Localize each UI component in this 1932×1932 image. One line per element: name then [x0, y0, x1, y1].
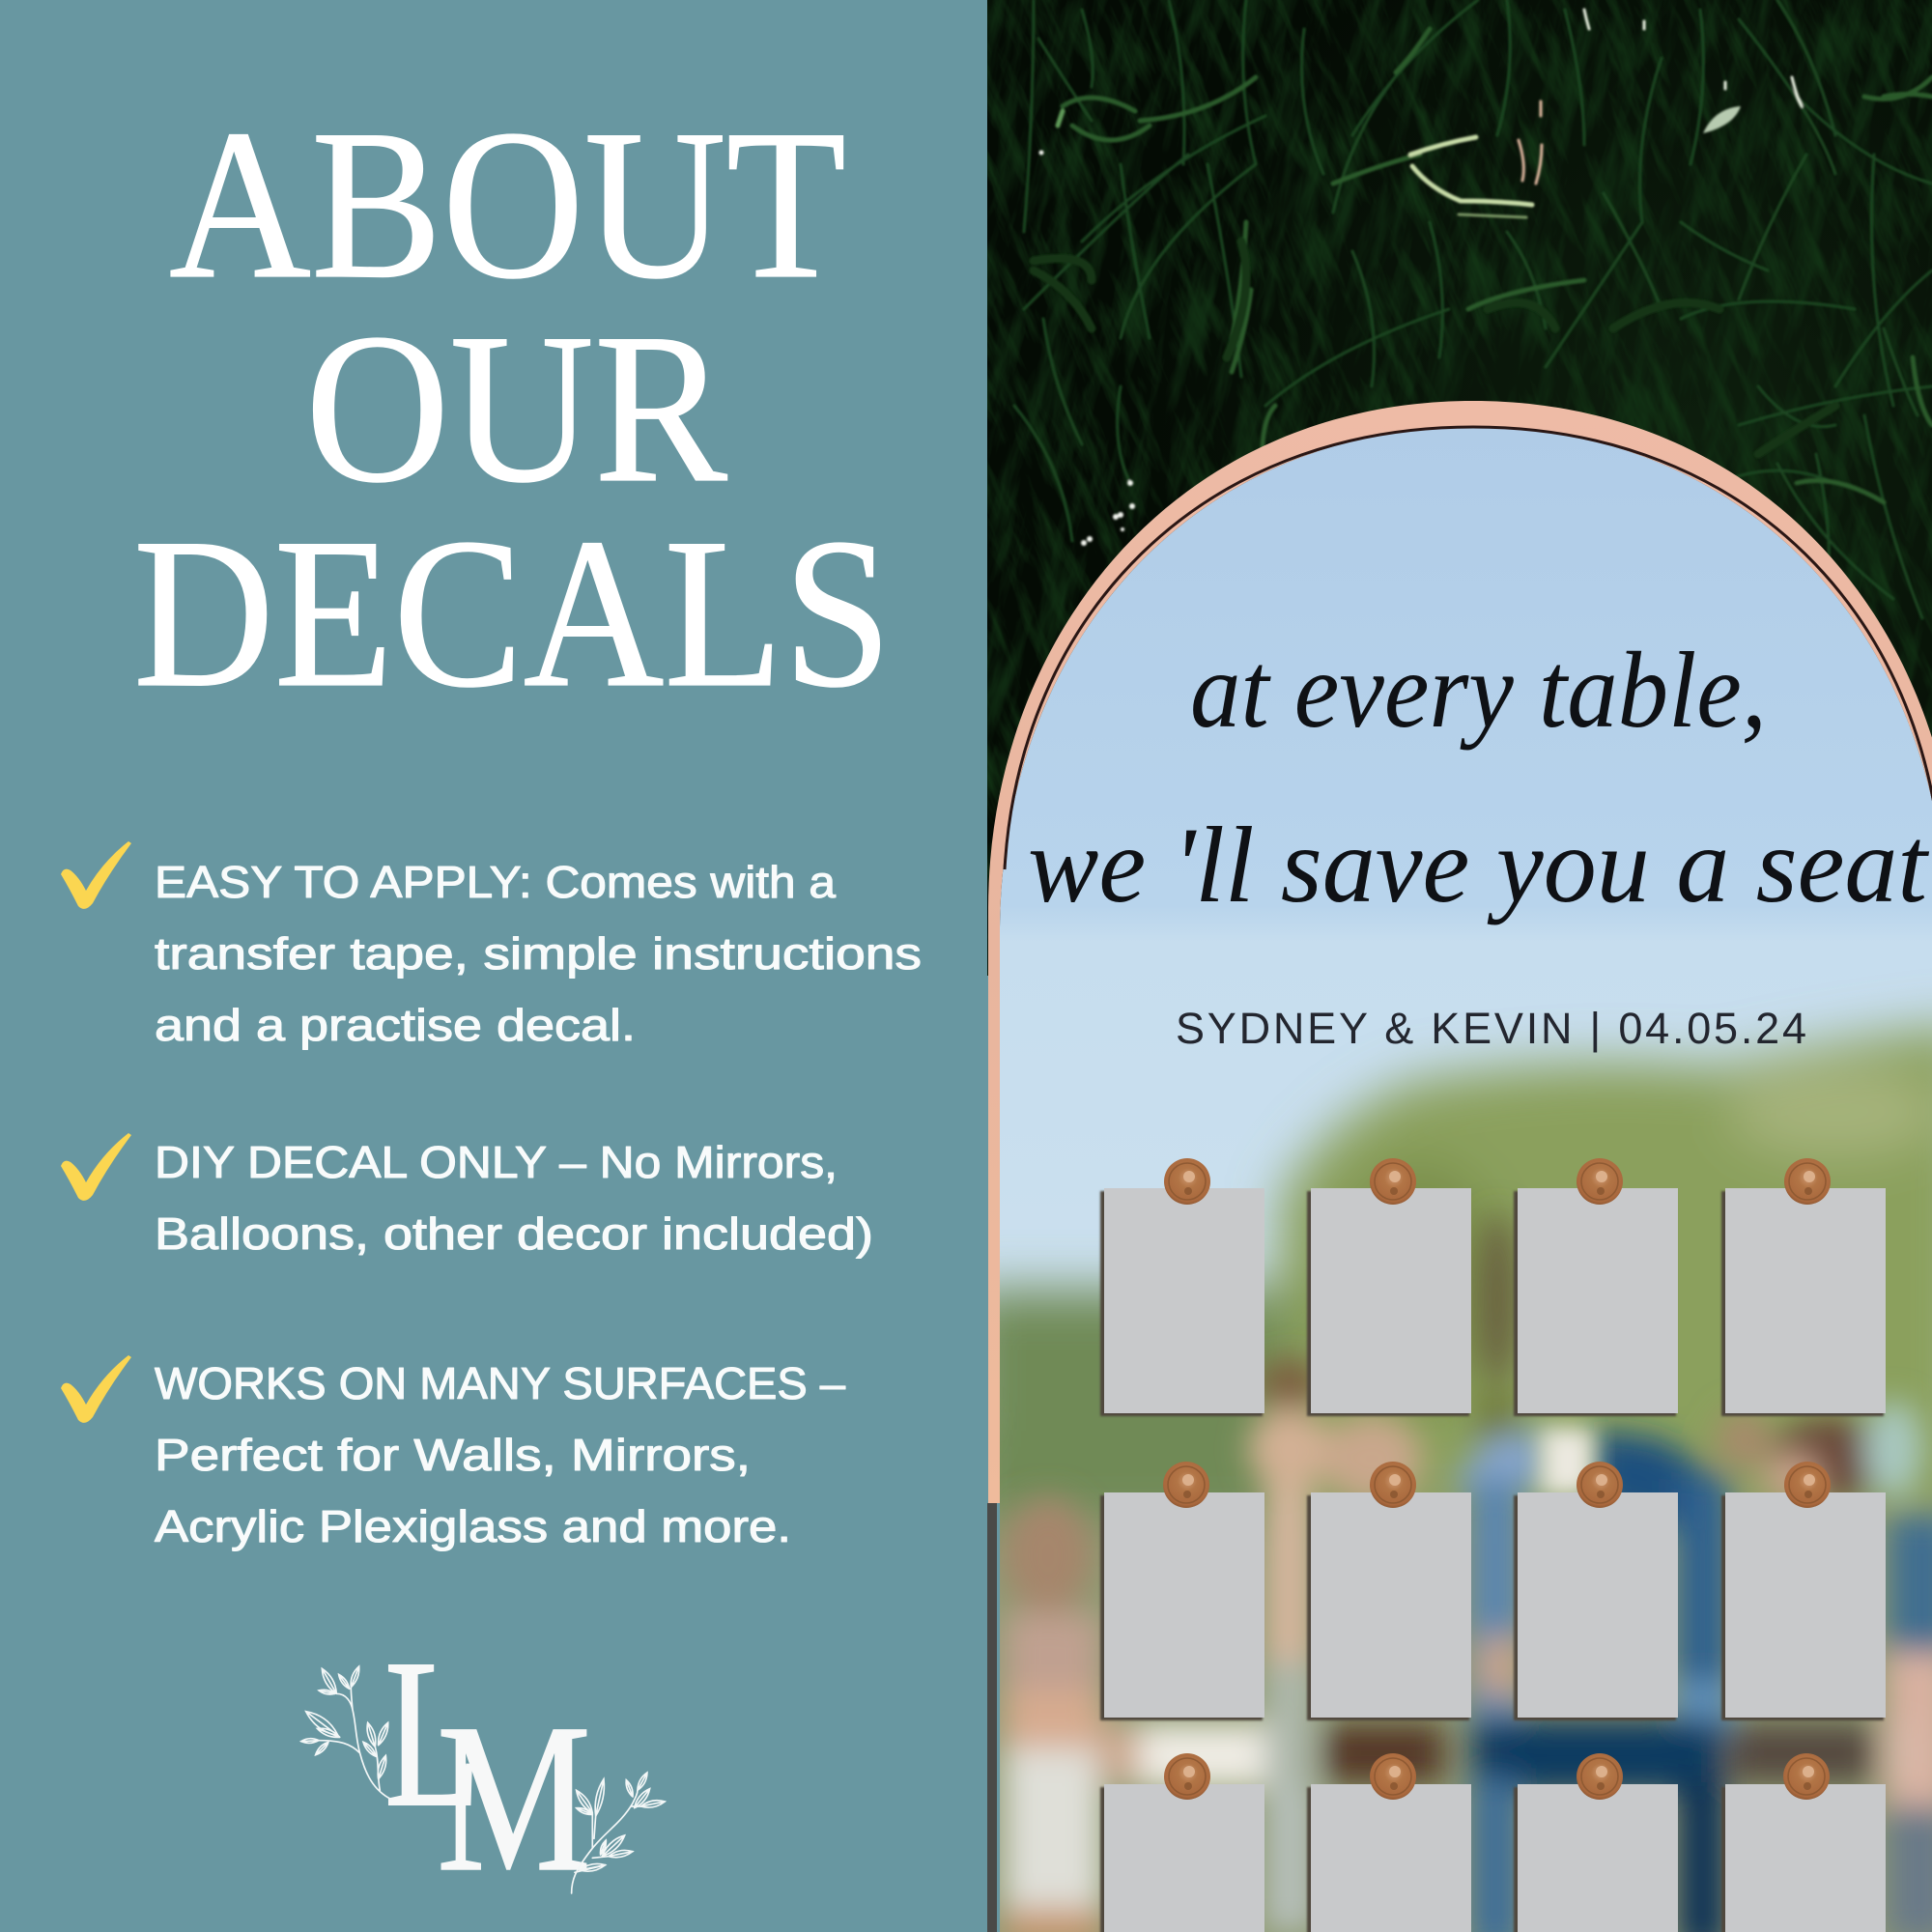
- text block: DIY decal only: DIY DECAL ONLY – No Mirrors,: [155, 1137, 838, 1187]
- text block: DIY decal only: Balloons, other decor included): [155, 1208, 873, 1259]
- place cards: row 1: [1100, 1158, 1886, 1416]
- icon: yellow check mark: [61, 841, 131, 909]
- text block: works on many surfaces: Acrylic Plexiglass and more.: [155, 1501, 791, 1551]
- mirror frame: rose gold arch: [987, 401, 1932, 1932]
- title: About Our Decals: ABOUT: [169, 86, 846, 324]
- text block: easy to apply: transfer tape, simple instructions: [155, 928, 922, 979]
- feature item: works on many surfaces: [61, 1355, 845, 1551]
- photo reflection: blurred trees and wedding party: [947, 1024, 1932, 1932]
- monogram letter L: L: [384, 1615, 481, 1851]
- monogram letter M: M: [437, 1680, 591, 1916]
- trees: [947, 1024, 1932, 1932]
- sprigs: hand-drawn leaves: [301, 1666, 665, 1893]
- blue suit: [1449, 1430, 1546, 1488]
- text block: works on many surfaces: WORKS ON MANY SURFACES –: [155, 1358, 845, 1408]
- upper figures and faces: [1257, 1358, 1322, 1408]
- script heading: at every table, we'll save you a seat: at every table,: [1190, 631, 1767, 751]
- photo: dark foliage background: [987, 0, 1932, 976]
- foliage blades: [1014, 0, 1932, 618]
- script heading: at every table, we'll save you a seat: [1028, 631, 1930, 925]
- title: About Our Decals: [133, 86, 892, 732]
- text block: DIY decal only: [155, 1137, 873, 1259]
- text block: easy to apply: EASY TO APPLY: Comes with a: [155, 857, 836, 907]
- feature item: easy to apply: [61, 841, 922, 1050]
- text block: works on many surfaces: [155, 1358, 845, 1551]
- place cards: row 3: [1100, 1753, 1886, 1932]
- script heading: at every table, we'll save you a seat: we 'll save you a seat: [1028, 806, 1930, 925]
- panel: left teal background: [0, 0, 987, 1932]
- mirror: arch sign surface: [947, 415, 1932, 1932]
- names and date line: SYDNEY & KEVIN | 04.05.24: [1176, 1004, 1806, 1053]
- place cards: row 2: [1100, 1462, 1886, 1720]
- text block: easy to apply: [155, 857, 922, 1050]
- lower figures: [1889, 1517, 1932, 1662]
- logo: LM monogram with leaves: [301, 1615, 665, 1916]
- icon: yellow check mark: [61, 1133, 131, 1201]
- icon: yellow check mark: [61, 1355, 131, 1423]
- title: About Our Decals: OUR: [305, 290, 727, 527]
- text block: easy to apply: and a practise decal.: [155, 1000, 636, 1050]
- feature item: DIY decal only: [61, 1133, 873, 1259]
- title: About Our Decals: DECALS: [133, 495, 892, 732]
- text block: works on many surfaces: Perfect for Walls, Mirrors,: [155, 1430, 751, 1480]
